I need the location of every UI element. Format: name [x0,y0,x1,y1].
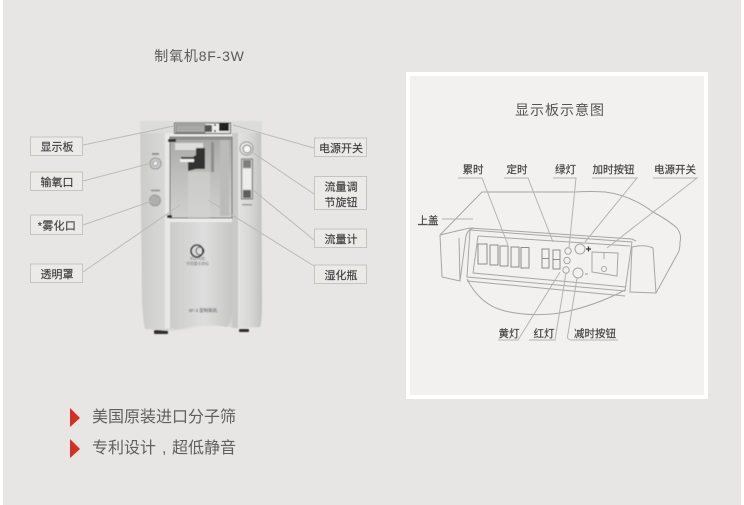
minus mark [585,273,588,275]
device line drawing [440,192,681,315]
feature: patented design, low noise: 超低静音 [172,439,236,457]
label: oxygen outlet [30,172,82,190]
feature: patented design, low noise [70,439,236,458]
brand logo: 中国著名商标 [186,261,209,266]
diagram labels: 加时按钮 [592,163,635,176]
diagram labels [418,163,696,340]
brand logo [186,245,209,266]
label: flow meter: 流量计 [324,232,358,246]
diagram labels: 上盖 [418,214,439,227]
flow meter [242,159,252,206]
diagram labels: 累时 [462,164,484,176]
brand logo: YUYUE [190,256,205,261]
flow knob [240,142,253,155]
label: power switch [314,138,366,156]
label: display board [30,137,82,156]
model mark: 8F-3 型制氧机 [189,307,218,314]
leader lines: machine callouts [83,125,314,272]
oxygen outlet [150,153,161,169]
nebulizer outlet [150,190,160,206]
oxygen concentrator machine [140,121,262,334]
label: oxygen outlet: 输氧口 [40,175,74,189]
label: flow adjust knob: 流量调 [324,180,358,194]
label: transparent cover [30,264,82,282]
label: flow adjust knob [314,176,366,210]
feature: patented design, low noise: , [162,440,166,457]
callouts: right labels [314,138,366,284]
diagram labels: 电源开关 [654,163,696,176]
callouts: left labels [30,137,82,282]
label: display board: 显示板 [40,140,74,154]
panel: display board diagram [408,74,706,397]
label: transparent cover: 透明罩 [40,268,74,281]
title: product name: 制氧机8F-3W [154,48,245,64]
label: nebulizer outlet: *雾化口 [38,218,76,232]
diagram labels: 减时按钮 [574,327,616,340]
transparent cover window [167,137,232,218]
display panel on machine [174,123,230,134]
diagram leader lines [418,178,697,340]
label: humidifier bottle: 湿化瓶 [324,268,358,282]
panel heading: 显示板示意图 [515,102,605,118]
label: power switch: 电源开关 [319,141,363,155]
label: nebulizer outlet [30,215,82,234]
label: humidifier bottle [314,265,366,284]
feature list [70,407,236,458]
diagram labels: 定时 [506,163,528,176]
label: flow meter [314,229,366,248]
feature: molecular sieve: 美国原装进口分子筛 [92,407,236,426]
diagram labels: 黄灯 [498,327,520,340]
label: flow adjust knob: 节旋钮 [324,195,358,209]
feature: patented design, low noise: 专利设计 [92,439,156,457]
machine feet [154,329,249,334]
machine body [140,121,262,331]
diagram labels: 绿灯 [555,163,576,176]
diagram labels: 红灯 [534,327,555,340]
plus mark [586,246,591,252]
